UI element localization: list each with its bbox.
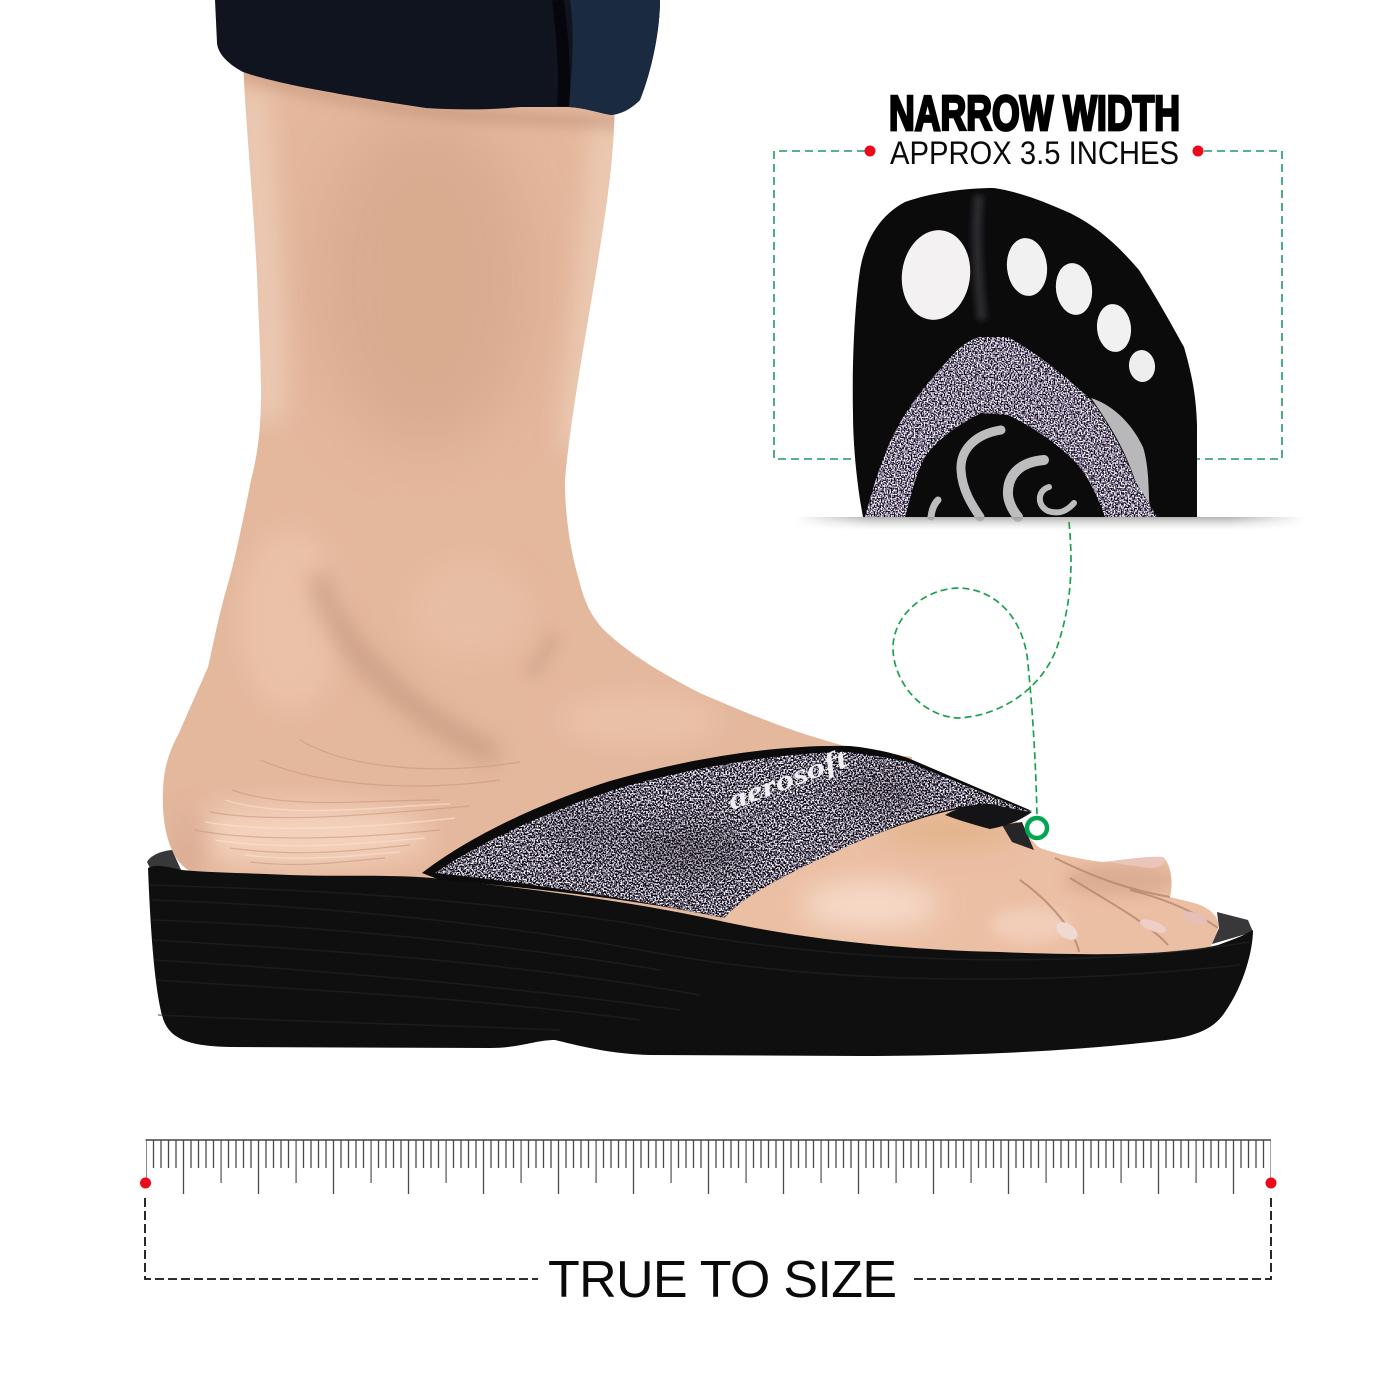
skin: lower leg [163, 60, 912, 925]
pants seam [558, 0, 564, 106]
toe post [1002, 822, 1034, 850]
glitter strap [435, 752, 1030, 918]
heading: narrow width: NARROW WIDTH [889, 87, 1180, 141]
glitter strap V [865, 337, 1157, 517]
toenails [1056, 922, 1078, 940]
inset shadow [803, 517, 1296, 528]
inset: sandal top view [795, 188, 1305, 530]
callout: narrow width heading [889, 87, 1180, 171]
infographic canvas [140, 0, 1296, 1298]
foot shading and toes [800, 816, 1218, 952]
ruler end marker left [140, 1178, 151, 1188]
silver swirl band [1091, 398, 1150, 510]
skin shading [168, 72, 720, 872]
toe pad 3 [1053, 261, 1095, 317]
pants [215, 0, 660, 115]
sandal [147, 742, 1253, 1056]
big toe pad [896, 226, 976, 324]
ruler end marker right [1266, 1178, 1276, 1188]
strap dark mottling [545, 772, 925, 878]
sole [148, 866, 1253, 1056]
green dashed connector [893, 522, 1071, 816]
red dot right [1192, 146, 1204, 156]
pants cuff blue panel [569, 0, 660, 115]
heel insole [147, 850, 182, 872]
insole tip [1212, 912, 1253, 944]
sole rim highlight and grain [150, 885, 1250, 1030]
strap edge [422, 746, 1032, 918]
subheading: approx 3.5 inches: APPROX 3.5 INCHES [890, 135, 1179, 171]
forefoot [722, 805, 1218, 975]
brand logo on strap: aerosoft [723, 742, 853, 816]
toe pad 2 [1004, 236, 1050, 298]
leg and foot photo illustration [163, 0, 1218, 975]
ruler [140, 1140, 1276, 1195]
red dot left [864, 146, 876, 156]
label: true to size: TRUE TO SIZE [548, 1251, 897, 1309]
strap underside near toe post [945, 805, 1032, 829]
green marker ring [1027, 818, 1047, 838]
width bracket dashed [774, 146, 1282, 459]
true to size bracket [145, 1198, 1271, 1279]
sole top view [853, 188, 1197, 517]
toe pad 5 [1127, 349, 1157, 383]
toe pad 4 [1095, 302, 1133, 354]
spiral print [931, 430, 1074, 517]
center ridge [977, 195, 982, 320]
